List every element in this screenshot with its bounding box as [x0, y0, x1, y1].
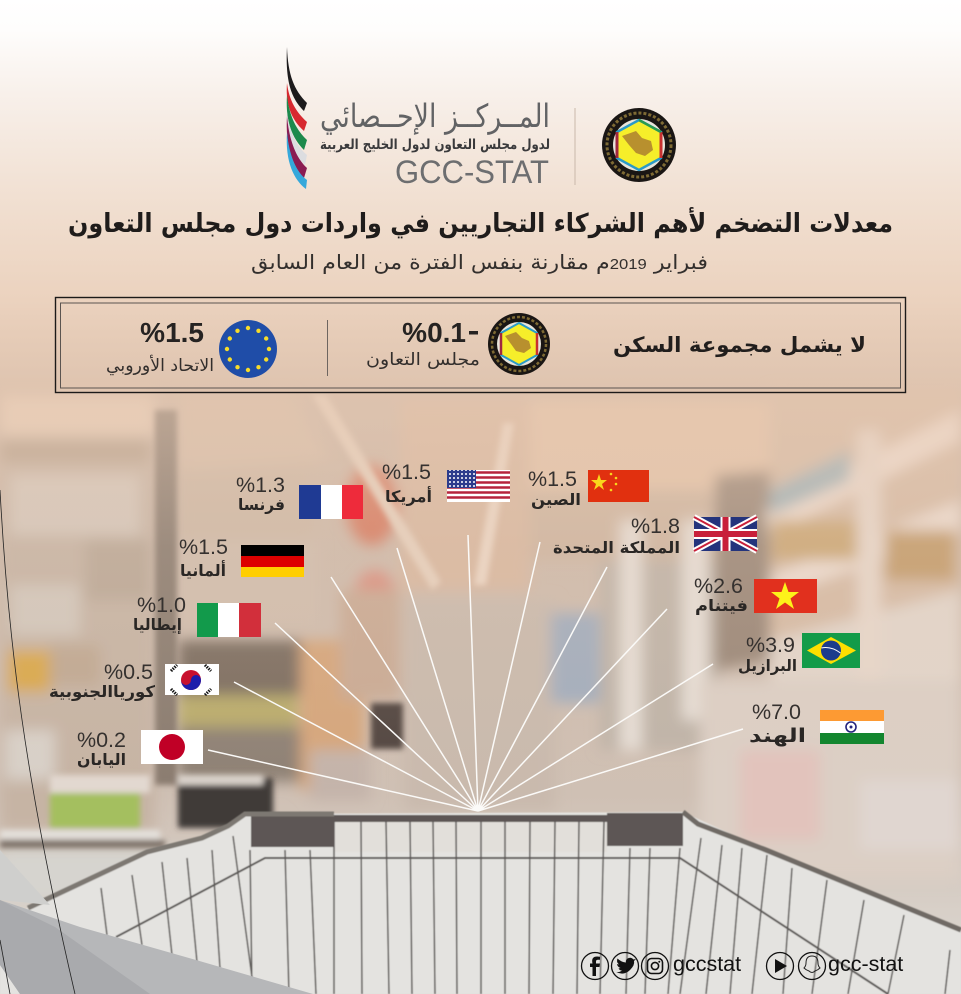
- country: India: [749, 700, 884, 747]
- country: United Kingdom: المملكة المتحدة: [553, 538, 680, 557]
- country: Brazil: %3.9: [746, 633, 795, 657]
- logo name in Latin: GCC-STAT: [395, 154, 549, 190]
- country: USA: [382, 460, 510, 506]
- country: USA: أمريكا: [385, 486, 432, 506]
- excludes population label: لا يشمل مجموعة السكن: [613, 333, 866, 357]
- emblem: GCC seal: [488, 313, 550, 375]
- shopping cart: [0, 812, 961, 994]
- GCC-STAT logo: [287, 47, 550, 190]
- country: Italy: إيطاليا: [133, 615, 182, 634]
- GCC value: %0.1: [402, 317, 466, 348]
- icon: facebook: [582, 952, 608, 980]
- logo name in Arabic: المــركــز الإحــصائي: [320, 97, 550, 135]
- country: Japan: [77, 728, 203, 769]
- country: Brazil: [738, 633, 860, 675]
- country: United Kingdom: %1.8: [631, 514, 680, 538]
- country: Germany: ألمانيا: [180, 560, 226, 580]
- icon: colored ribbons: [287, 47, 307, 189]
- icon: EU flag: [219, 320, 277, 378]
- country: Japan: اليابان: [77, 750, 126, 769]
- country: Italy: %1.0: [137, 593, 186, 617]
- country: India: %7.0: [752, 700, 801, 724]
- corner decoration: grey facets and thin curve: [0, 490, 313, 994]
- country: Germany: %1.5: [179, 535, 228, 559]
- divider: [574, 108, 576, 185]
- country: Japan: %0.2: [77, 728, 126, 752]
- icon: twitter: [612, 952, 638, 980]
- country: France: فرنسا: [238, 495, 285, 514]
- country: Vietnam: [694, 574, 817, 615]
- social media footer: [582, 952, 903, 980]
- icon: youtube: [766, 952, 794, 980]
- icon: snapchat: [798, 952, 826, 980]
- GCC label: مجلس التعاون: [366, 350, 480, 370]
- country: China: الصين: [531, 490, 581, 509]
- panel: headline rates: [56, 298, 906, 392]
- radiating connector lines: [208, 535, 743, 811]
- country: Brazil: البرازيل: [738, 656, 797, 675]
- icon: instagram: [642, 952, 668, 980]
- title: معدلات التضخم لأهم الشركاء التجاريين في واردات دول مجلس التعاون: [68, 207, 893, 239]
- country: USA: %1.5: [382, 460, 431, 484]
- country: South Korea: كورياالجنوبية: [49, 682, 156, 701]
- country: China: [528, 467, 649, 509]
- country: Italy: [133, 593, 261, 637]
- handle: gccstat: gccstat: [673, 952, 741, 976]
- country: South Korea: %0.5: [104, 660, 153, 684]
- country: France: %1.3: [236, 473, 285, 497]
- country: United Kingdom: [553, 514, 757, 557]
- country: South Korea: [49, 660, 219, 701]
- country: Vietnam: فيتنام: [695, 596, 748, 615]
- country: Germany: [179, 535, 304, 580]
- logo subtitle in Arabic: لدول مجلس التعاون لدول الخليج العربية: [320, 137, 550, 153]
- country: India: الهند: [749, 725, 806, 747]
- EU label: الاتحاد الأوروبي: [106, 355, 214, 376]
- country: France: [236, 473, 363, 519]
- subtitle: فبراير 2019م مقارنة بنفس الفترة من العام السابق: [251, 250, 708, 274]
- EU value: %1.5: [140, 317, 204, 348]
- emblem: GCC seal top: [602, 108, 676, 182]
- handle: gcc-stat: gcc-stat: [828, 952, 903, 976]
- country: Vietnam: %2.6: [694, 574, 743, 598]
- country: China: %1.5: [528, 467, 577, 491]
